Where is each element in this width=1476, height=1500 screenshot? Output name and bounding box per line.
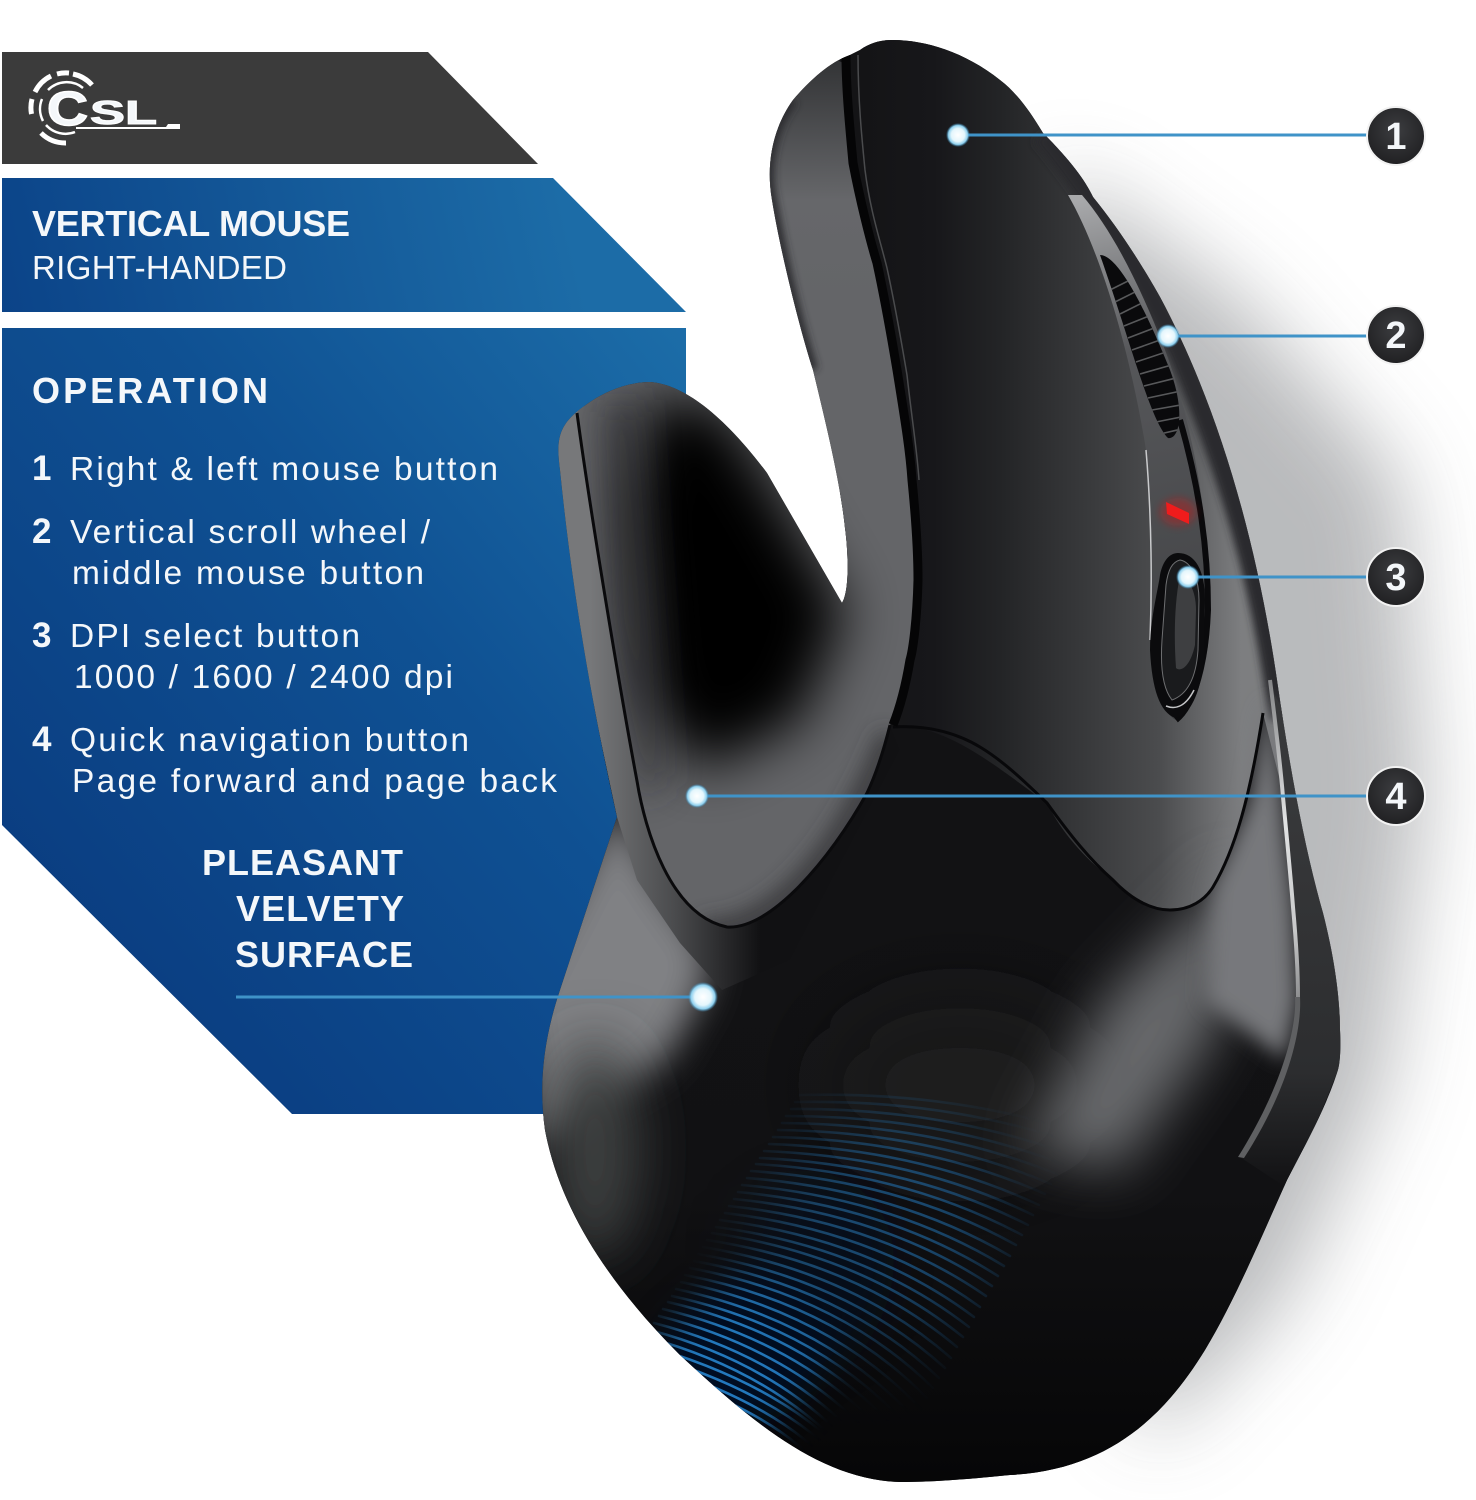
vertical mouse [515, 20, 1360, 1500]
right rim [1043, 133, 1282, 720]
index band and thumb interior [577, 60, 914, 926]
brand header panel [2, 52, 538, 164]
callout 1 [946, 107, 1425, 165]
operation heading: OPERATION [32, 370, 268, 411]
surface callout text: VELVETY [236, 888, 404, 929]
title: VERTICAL MOUSE [32, 203, 350, 244]
side control strip [1068, 195, 1210, 720]
callout 4: 4 [1385, 776, 1407, 818]
product title panel [2, 178, 686, 312]
main button slit [846, 55, 918, 725]
callout 4 [685, 767, 1425, 825]
surface callout line [236, 982, 718, 1012]
thumb rim [558, 406, 747, 990]
callout 1: 1 [1385, 116, 1407, 158]
surface callout text: PLEASANT [202, 842, 403, 883]
lit corner beside seam [1205, 700, 1298, 1060]
body shading [515, 20, 1360, 1500]
item 3: 3 [32, 616, 51, 655]
main button tone [840, 30, 1360, 1030]
item 3 [32, 616, 453, 696]
DPI button [1150, 553, 1205, 718]
item 2: 2 [32, 512, 51, 551]
item 4: Quick navigation button [70, 722, 469, 759]
thumb button seam [577, 413, 890, 927]
scroll wheel [1100, 255, 1186, 438]
textured ribs [652, 1094, 1040, 1444]
red LED [1160, 498, 1196, 526]
CSL logo [31, 73, 180, 143]
item 2: Vertical scroll wheel / [70, 514, 431, 551]
callout 3 [1176, 548, 1425, 606]
lower shading [886, 1048, 1034, 1122]
mouse body [542, 40, 1340, 1482]
side zone [1246, 694, 1340, 1186]
subtitle: RIGHT-HANDED [32, 249, 287, 286]
item 2 [32, 512, 431, 592]
CSL logo: C [47, 83, 88, 136]
callout 3: 3 [1385, 557, 1407, 599]
item 3: 1000 / 1600 / 2400 dpi [74, 659, 453, 696]
side highlight [1270, 680, 1298, 997]
palm lobe highlight [515, 800, 710, 1150]
palm lower body [530, 700, 1360, 1500]
callout 2 [1156, 306, 1425, 364]
item 1: 1 [32, 449, 51, 488]
callout 2: 2 [1385, 315, 1407, 357]
soft shadow behind mouse [1000, 170, 1425, 1440]
surface callout text [202, 842, 413, 975]
CSL logo: SL [90, 94, 157, 131]
item 2: middle mouse button [72, 555, 424, 592]
item 4 [32, 720, 557, 800]
item 4: Page forward and page back [72, 763, 557, 800]
item 4: 4 [32, 720, 52, 759]
item 3: DPI select button [70, 618, 360, 655]
palm button seam [893, 713, 1263, 910]
palm diagonal highlight [1025, 870, 1272, 1170]
surface callout text: SURFACE [235, 934, 413, 975]
operation panel [2, 328, 686, 1114]
item 1: Right & left mouse button [70, 451, 498, 488]
